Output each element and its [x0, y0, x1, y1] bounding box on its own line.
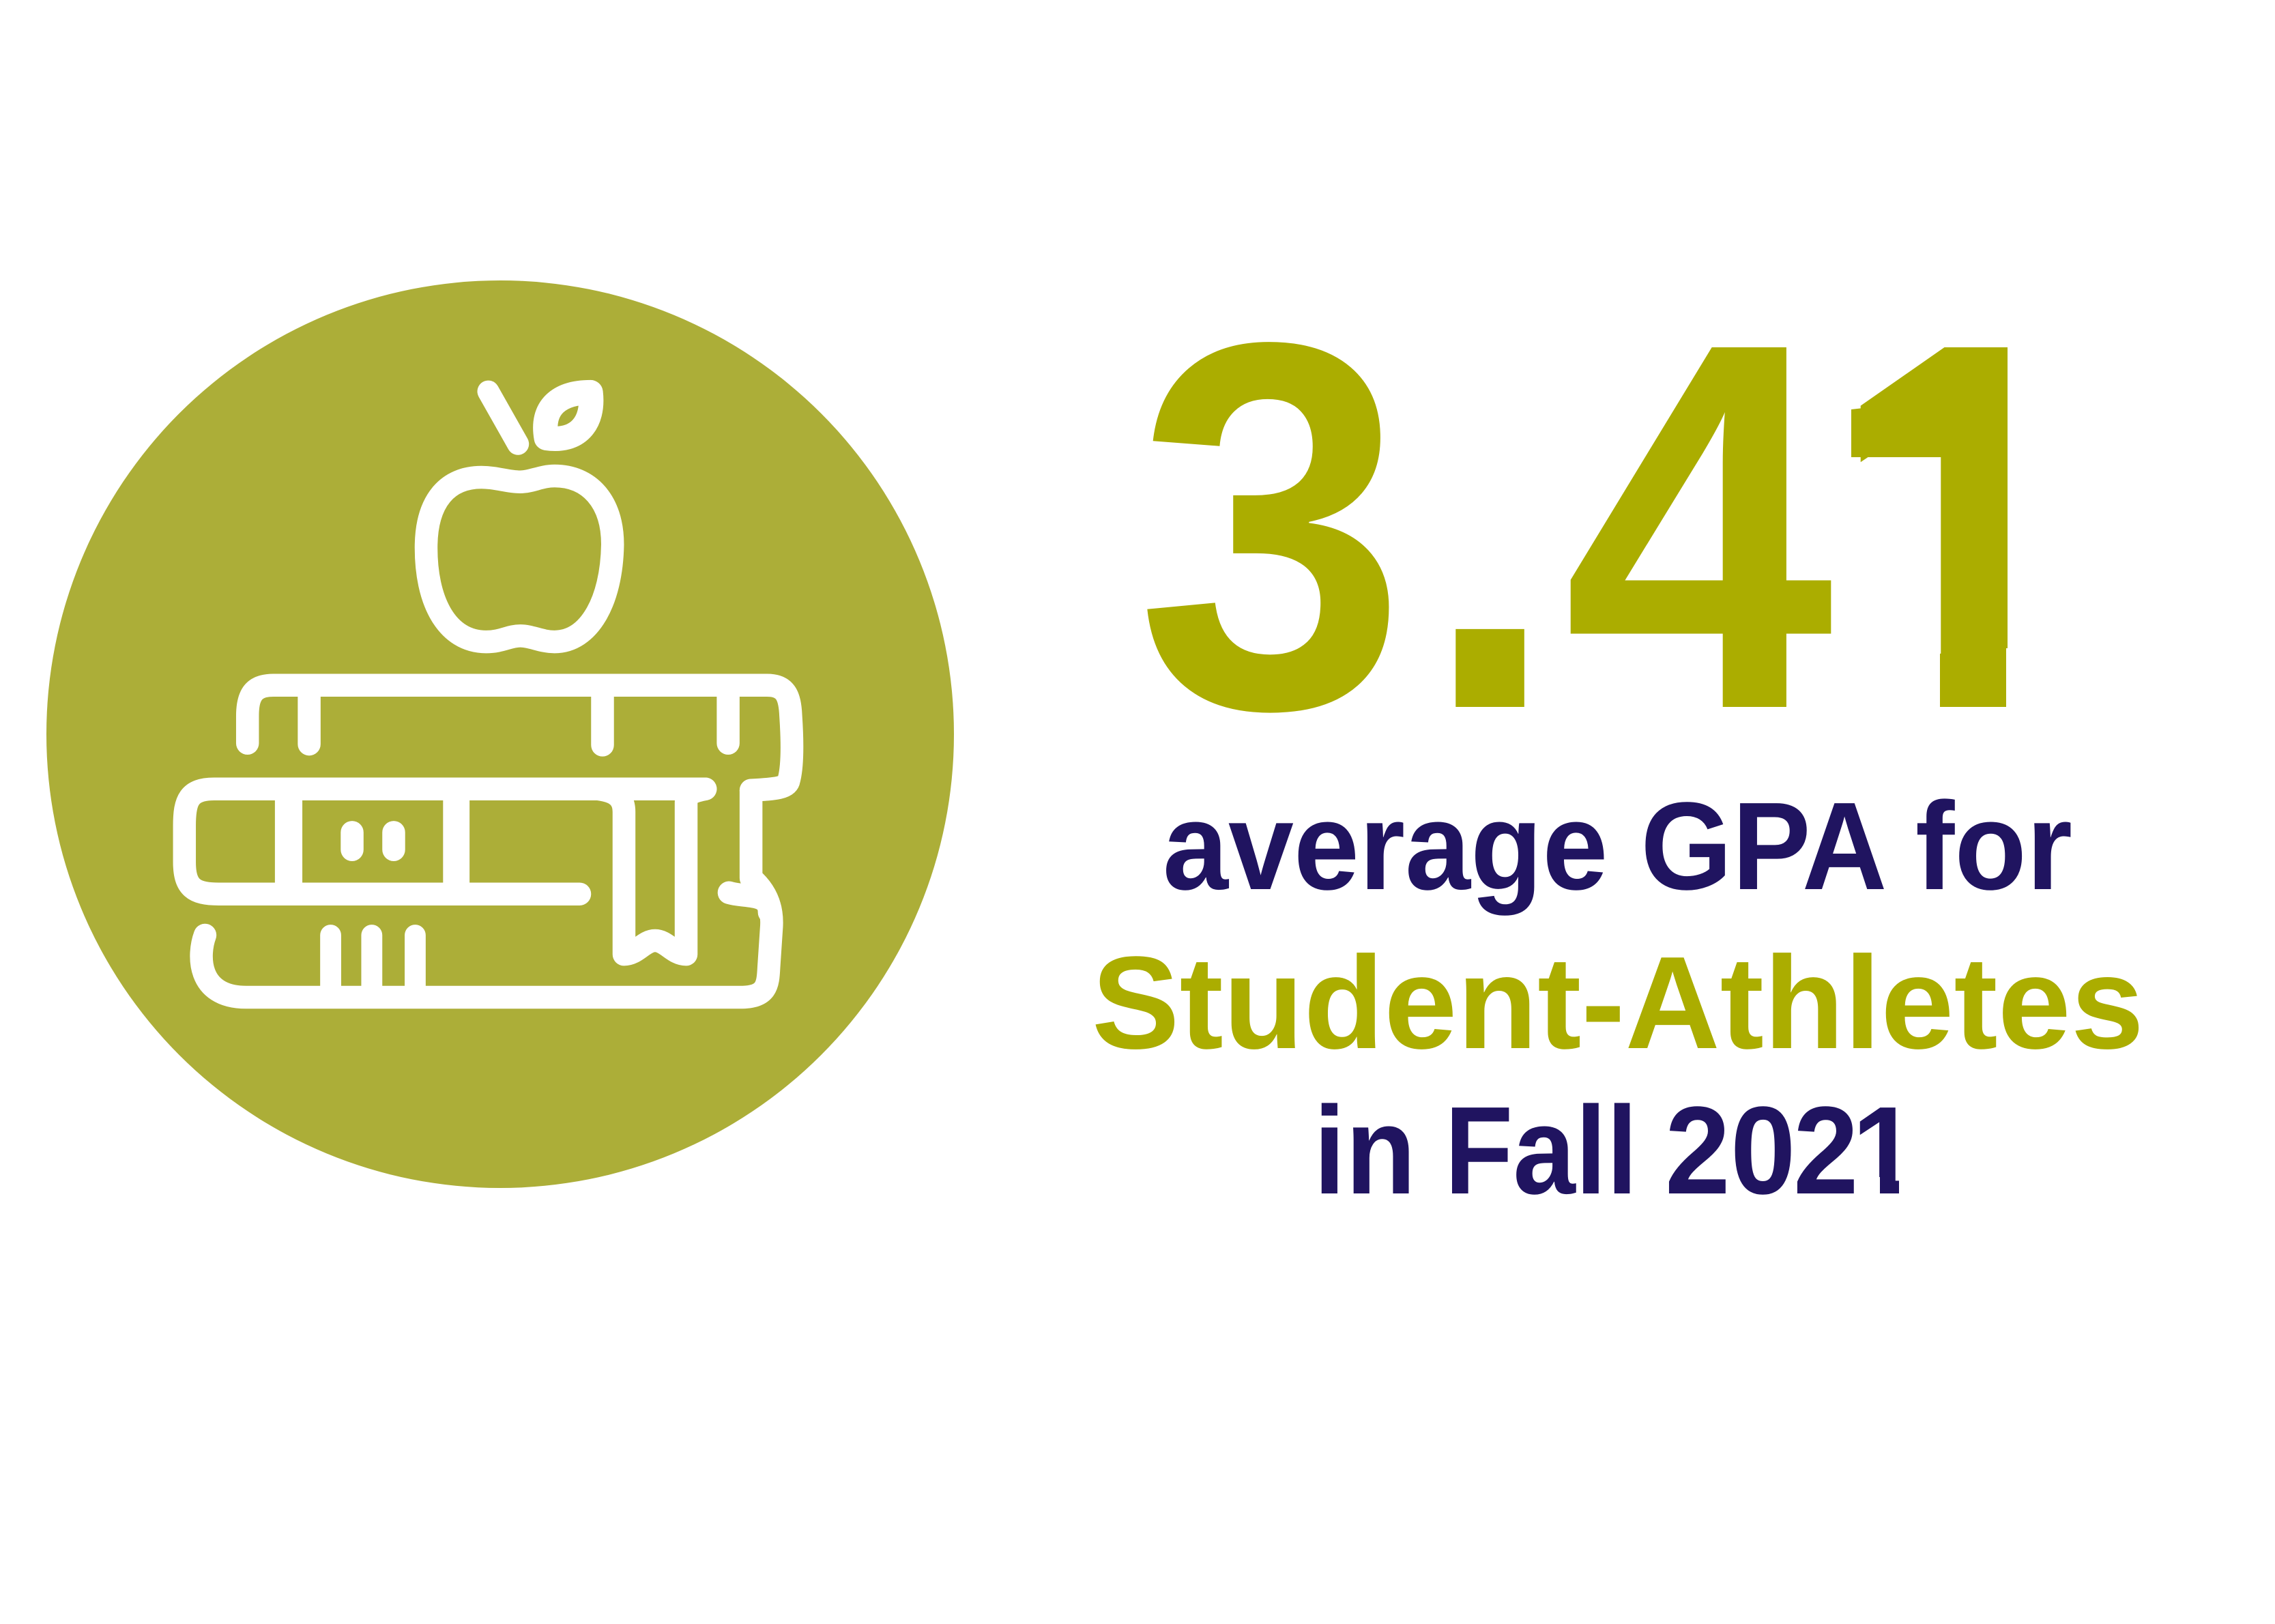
caption line 3 [1314, 1080, 1935, 1220]
icon: top book [248, 685, 792, 790]
panel: olive circle with icon [46, 280, 954, 1188]
icon: apple on stack of books [184, 392, 792, 998]
caption line 3: Fall [1445, 1080, 1638, 1220]
caption line 2: Student-Athletes [1092, 929, 2144, 1076]
caption line 3: 2021 [1665, 1080, 1917, 1220]
icon: apple [426, 392, 613, 642]
caption line 1: average GPA for [1163, 776, 2072, 916]
icon: bottom book [201, 790, 772, 998]
caption line 3: in [1314, 1080, 1416, 1220]
icon: middle book [184, 789, 706, 955]
big number: 3.41 [1136, 233, 2098, 818]
caption [1092, 776, 2144, 1220]
